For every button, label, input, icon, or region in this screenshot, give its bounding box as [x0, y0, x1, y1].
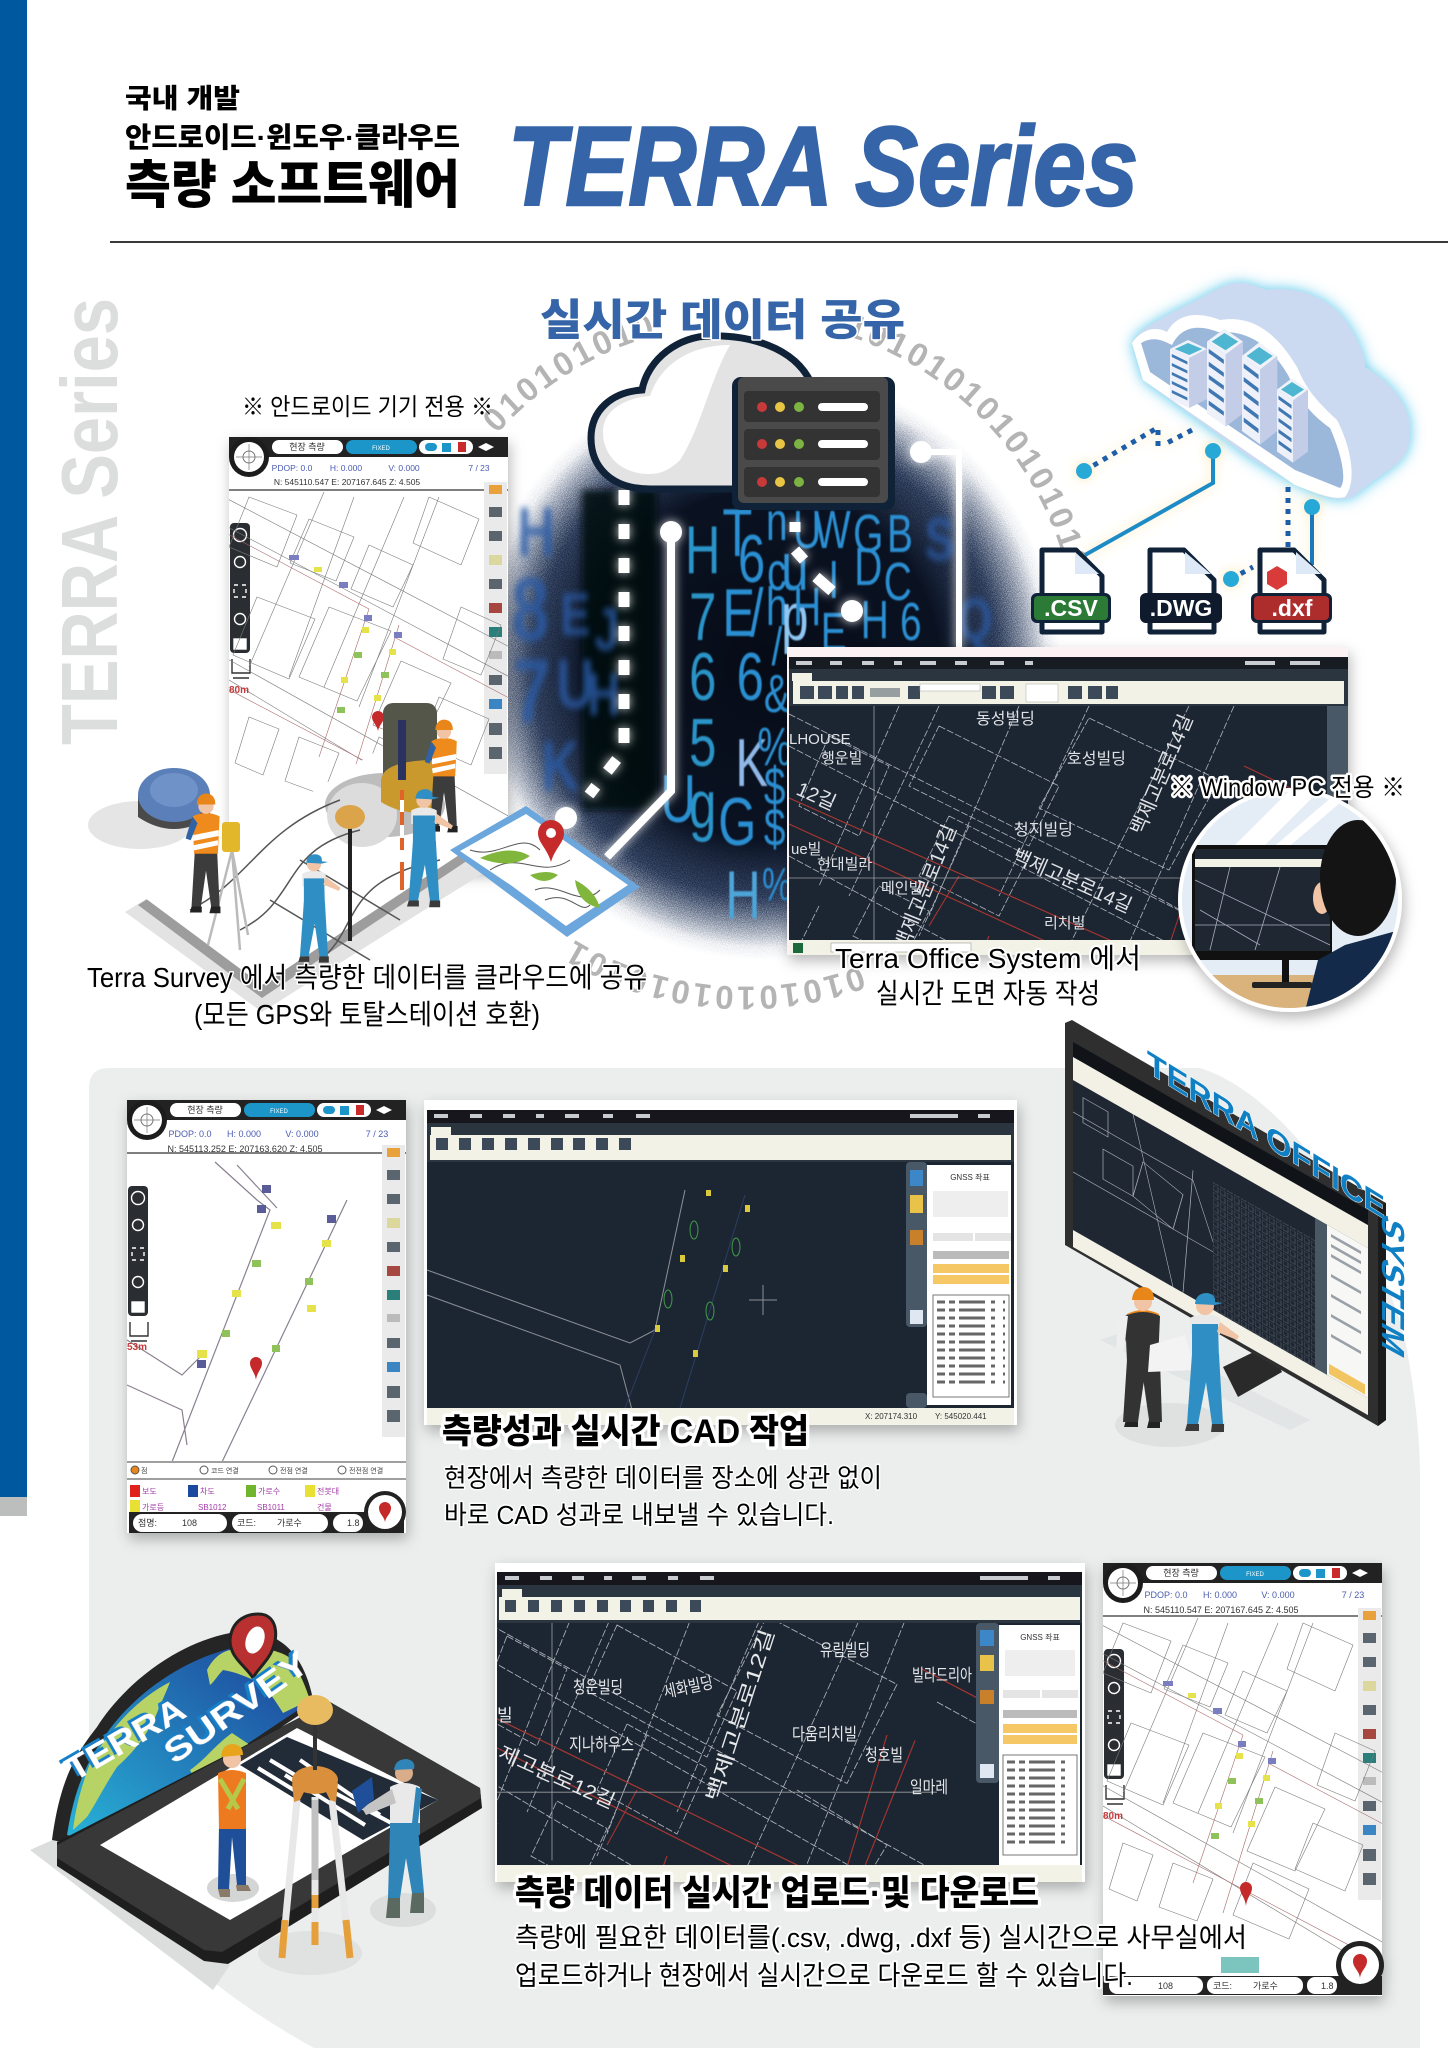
icon: folded map with pin [450, 806, 640, 937]
sharp code glyphs: c [767, 541, 787, 601]
phone status text: V: 0.000 [1261, 1590, 1295, 1600]
bottom survey controls: 건물 [317, 1502, 332, 1512]
bottom survey controls: 점 [141, 1467, 147, 1475]
sharp code glyphs: E [821, 601, 847, 661]
bottom controls: 1.8 [1321, 1981, 1334, 1991]
phone status text: 현장 측량 [187, 1104, 223, 1115]
bottom survey controls: 전점 연결 [280, 1466, 308, 1475]
street map [1098, 1618, 1393, 1963]
phone status text: 80m [1103, 1811, 1123, 1822]
data lines [555, 441, 959, 857]
sharp code glyphs: H [685, 511, 720, 588]
monitor stand [1100, 1330, 1310, 1430]
text: terra office caption [835, 943, 1141, 1009]
phone status text [1103, 1567, 1364, 1822]
CAD canvas [497, 1623, 1082, 1865]
illustration: terra survey tablet [30, 1614, 482, 1990]
ribbon icons [800, 686, 1118, 699]
slab [125, 752, 520, 1012]
header heading [125, 84, 460, 215]
sharp code glyphs: 6 [737, 638, 764, 715]
tablet screen [100, 1728, 438, 1920]
phone status text: 7 / 23 [1342, 1590, 1364, 1600]
GNSS panel [999, 1625, 1080, 1865]
bottom survey controls: 전전점 연결 [349, 1466, 383, 1475]
text: terra survey caption [87, 962, 647, 1030]
CAD labels: 빌 [497, 1706, 513, 1725]
heading: terra: TERRA [59, 1690, 192, 1788]
sharp code glyphs: u [781, 528, 808, 605]
blurred code glyphs: K [541, 728, 579, 806]
sharp code glyphs: I [828, 549, 839, 609]
text: terra office caption: Terra Office System 에서 [835, 943, 1141, 974]
sharp code glyphs: H [861, 589, 889, 649]
bottom survey controls: 점명: [138, 1517, 157, 1528]
bottom survey controls [127, 1461, 406, 1533]
heading: CAD work: 측량성과 실시간 CAD 작업 [442, 1413, 809, 1451]
text: upload description: 측량에 필요한 데이터를(.csv, .dwg, .dxf 등) 실시간으로 사무실에서 [515, 1923, 1247, 1953]
CAD labels [789, 710, 1198, 953]
dome [52, 1632, 314, 1850]
sharp code glyphs: H [793, 576, 821, 636]
sharp code glyphs: 5 [689, 704, 716, 781]
illustration: office monitor [1065, 1020, 1410, 1447]
bottom survey controls: 전봇대 [317, 1486, 339, 1496]
bottom controls: 가로수 [1253, 1981, 1278, 1991]
workers [186, 720, 458, 963]
phone status text: H: 0.000 [330, 463, 362, 473]
icon: total station [381, 703, 437, 890]
icon: locate button [364, 1491, 406, 1533]
CAD labels: 다움리치빌 [792, 1725, 857, 1744]
phone status text: H: 0.000 [227, 1129, 261, 1139]
CAD labels: 12길 [793, 778, 839, 815]
icon: locate button [1336, 1941, 1384, 1989]
sharp code glyphs: % [757, 716, 792, 776]
CAD labels: 청운빌딩 [573, 1678, 623, 1697]
sharp code glyphs: n [766, 491, 788, 551]
CAD labels: 백제고분로14길 [890, 821, 961, 953]
ribbon icons [436, 1138, 631, 1150]
side bar [0, 0, 27, 1516]
text: CAD description: 바로 CAD 성과로 내보낼 수 있습니다. [444, 1500, 834, 1530]
cloud body [1132, 283, 1410, 499]
text: CAD description [444, 1463, 882, 1530]
sharp code glyphs: / [750, 574, 764, 651]
heading: survey: SURVEY [157, 1644, 316, 1771]
panel: CAD screenshot [424, 1100, 1017, 1425]
bottom survey controls: SB1011 [257, 1503, 285, 1512]
panel: gray feature background [89, 1068, 1420, 2048]
header heading: 측량 소프트웨어 [125, 157, 460, 215]
bottom survey controls: 코드 연결 [211, 1466, 239, 1475]
blurred code glyphs: H [517, 494, 555, 572]
text: terra survey caption: Terra Survey 에서 측량한 데이터를 클라우드에 공유 [87, 962, 647, 993]
sharp code glyphs [661, 491, 922, 933]
sharp code glyphs: D [854, 536, 882, 596]
sharp code glyphs: E [722, 574, 755, 651]
header heading: 국내 개발 [125, 84, 240, 114]
bottom survey controls: SB1012 [198, 1503, 227, 1512]
label: android only: ※ 안드로이드 기기 전용 ※ [242, 394, 493, 421]
side tools [906, 1162, 927, 1327]
CAD labels: 청호빌 [865, 1746, 903, 1765]
sharp code glyphs: G [718, 783, 756, 860]
phone status text: H: 0.000 [1203, 1590, 1237, 1600]
panel: CAD screenshot: X: 207174.310 [865, 1412, 918, 1421]
text: upload description [515, 1923, 1247, 1991]
bottom survey controls: 1.8 [347, 1518, 360, 1528]
bottom survey controls: 가로등 [142, 1503, 164, 1512]
server stacks [1170, 329, 1308, 463]
heading: terra office: TERRA OFFICE [1147, 1044, 1385, 1227]
panel: CAD upload screenshot [490, 1562, 1094, 1896]
workers [1115, 1287, 1239, 1447]
CAD labels: 세화빌딩 [662, 1673, 715, 1702]
sharp code glyphs: C [884, 551, 912, 611]
panel: terra office hero screenshot [781, 645, 1358, 969]
sharp code glyphs: G [853, 503, 883, 563]
tripod [258, 1695, 362, 1975]
CAD labels: 메인빌 [881, 880, 922, 897]
workers [207, 1744, 436, 1927]
panel: phone app with route [127, 1100, 406, 1533]
phone status text: N: 545113.252 E: 207163.620 Z: 4.505 [168, 1144, 322, 1154]
blurred code glyphs: Q [957, 587, 993, 654]
title: TERRA Series: TERRA Series [508, 104, 1138, 229]
icon: csv file: .CSV [1044, 595, 1098, 621]
bottom controls: 108 [1158, 1981, 1173, 1991]
connectors to files [1076, 428, 1320, 587]
sharp code glyphs: K [735, 724, 768, 801]
phone status text: FIXED [1246, 1572, 1264, 1578]
phone status text: 7 / 23 [366, 1129, 388, 1139]
CAD labels: 동성빌딩 [976, 710, 1035, 728]
sharp code glyphs: 6 [689, 638, 716, 715]
illustration: cloud with servers [1132, 283, 1410, 499]
icon: dxf file [1251, 550, 1332, 632]
panel: phone app upload [1098, 1563, 1393, 1996]
side tools [976, 1623, 999, 1783]
header rule [110, 241, 1448, 243]
blurred code glyphs [511, 494, 993, 806]
CAD labels: 유림빌딩 [820, 1641, 870, 1660]
sharp code glyphs: W [814, 499, 851, 559]
icon: user at monitor [1170, 788, 1410, 1015]
icon: dwg file [1140, 550, 1222, 632]
icon: map pin [230, 1614, 276, 1678]
bottom survey controls: 코드: [237, 1518, 256, 1528]
CAD labels: 백제고분로12길 [702, 1626, 779, 1805]
blurred code glyphs: 7 [513, 641, 551, 741]
icon: cloud [591, 336, 880, 489]
CAD labels: 일마레 [910, 1778, 948, 1797]
CAD labels: 지나하우스 [569, 1735, 634, 1755]
icon: csv file [1031, 550, 1111, 632]
sharp code glyphs: p [781, 578, 808, 655]
blurred code glyphs: 8 [511, 559, 549, 659]
GNSS panel [927, 1165, 1011, 1405]
bottom survey controls: 가로수 [277, 1518, 302, 1528]
CAD labels: 행운빌 [821, 750, 862, 767]
blurred code glyphs: J [594, 597, 619, 664]
CAD canvas [427, 1162, 1014, 1410]
sharp code glyphs: B [887, 503, 913, 563]
sharp code glyphs: h [766, 576, 788, 636]
phone status text: 53m [127, 1342, 147, 1353]
GNSS panel: GNSS 좌표 [950, 1173, 990, 1182]
status bar [427, 1408, 1014, 1425]
sharp code glyphs: / [771, 616, 783, 676]
illustration: field survey [88, 703, 640, 1012]
phone status text: 80m [229, 685, 249, 696]
bottom survey controls: 보도 [142, 1487, 157, 1496]
panel: CAD screenshot: Y: 545020.441 [935, 1412, 987, 1421]
sharp code glyphs: g [689, 766, 716, 843]
sharp code glyphs: $ [764, 797, 786, 857]
sharp code glyphs: 6 [738, 520, 765, 597]
sharp code glyphs: 6 [900, 591, 922, 651]
monitor screen [1073, 1042, 1368, 1415]
CAD labels: 제고분로12길 [495, 1742, 619, 1813]
monitor body [1065, 1020, 1386, 1426]
bottom survey controls: 108 [182, 1518, 197, 1528]
blurred code glyphs: H [588, 662, 620, 729]
CAD labels: LHOUSE [789, 731, 851, 748]
vertical watermark: TERRA Series [45, 298, 134, 745]
tablet shadow [30, 1838, 230, 1990]
phone status text [127, 1104, 388, 1353]
bottom survey controls: 차도 [200, 1487, 215, 1496]
phone status text: 현장 측량 [289, 441, 325, 452]
CAD labels [495, 1626, 972, 1813]
heading: system: SYSTEM [1375, 1208, 1410, 1363]
phone status text: FIXED [372, 446, 390, 452]
icon: map pin [250, 1357, 262, 1380]
panel: hero phone app [224, 437, 519, 870]
icon: dxf file: .dxf [1272, 595, 1313, 621]
blurred code glyphs: U [556, 646, 594, 724]
GNSS panel: GNSS 좌표 [1020, 1633, 1060, 1642]
text: CAD description: 현장에서 측량한 데이터를 장소에 상관 없이 [444, 1463, 882, 1493]
sharp code glyphs: U [661, 760, 696, 837]
sharp code glyphs: H [725, 856, 761, 933]
sharp code glyphs: $ [764, 756, 786, 816]
phone status text: PDOP: 0.0 [1144, 1590, 1188, 1600]
blurred code glyphs: S [925, 507, 955, 574]
bottom controls [1103, 1941, 1384, 1995]
phone status text: 7 / 23 [468, 463, 490, 473]
sharp code glyphs: & [764, 663, 790, 723]
text: upload description: 업로드하거나 현장에서 실시간으로 다운로드 할 수 있습니다. [515, 1961, 1133, 1991]
phone status text: PDOP: 0.0 [272, 463, 313, 473]
icon: server rack [732, 377, 895, 510]
bottom survey controls: 가로수 [258, 1487, 280, 1496]
survey points [197, 1222, 331, 1358]
icon: map pin [372, 711, 384, 731]
sharp code glyphs: % [762, 860, 792, 910]
phone status text: V: 0.000 [285, 1129, 319, 1139]
phone status text: PDOP: 0.0 [168, 1129, 212, 1139]
phone status text: N: 545110.547 E: 207167.645 Z: 4.505 [274, 477, 420, 487]
heading: data upload and download: 측량 데이터 실시간 업로드·및 다운로드 [515, 1874, 1039, 1913]
binary ring: 01010101010101 [568, 940, 864, 1010]
blurred code glyphs: E [560, 582, 590, 649]
sphere background [470, 370, 1060, 960]
cloud opening [1132, 315, 1352, 498]
street map [229, 492, 508, 816]
sharp code glyphs: T [722, 494, 752, 571]
CAD labels: 리치빌 [1044, 915, 1085, 932]
heading: real-time data sharing: 실시간 데이터 공유 [540, 297, 905, 345]
icon: map pin [1240, 1882, 1252, 1906]
CAD labels: 백제고분로14길 [1009, 845, 1135, 918]
route lines [127, 1162, 347, 1462]
text: terra survey caption: (모든 GPS와 토탈스테이션 호환) [194, 999, 540, 1030]
CAD labels: 호성빌딩 [1067, 750, 1126, 768]
tablet body [57, 1702, 482, 1964]
sharp code glyphs: 7 [689, 578, 716, 655]
CAD labels: ue빌 [791, 841, 822, 858]
phone status text: N: 545110.547 E: 207167.645 Z: 4.505 [1144, 1605, 1298, 1615]
phone status text: V: 0.000 [388, 463, 420, 473]
CAD labels: 빌라드리아 [912, 1666, 972, 1685]
CAD labels: 청지빌딩 [1014, 821, 1073, 839]
icon: GNSS receiver [88, 768, 210, 849]
panel: hero data sphere [484, 316, 1088, 1010]
header heading: 안드로이드·윈도우·클라우드 [125, 122, 460, 153]
icon: dwg file: .DWG [1150, 595, 1212, 621]
CAD canvas [789, 706, 1348, 940]
phone status text: 현장 측량 [1163, 1567, 1199, 1578]
sharp code glyphs: U [793, 499, 821, 559]
label: window pc only: ※ Window PC 전용 ※ [1170, 774, 1405, 802]
phone status text: FIXED [270, 1109, 288, 1115]
CAD labels: 현대빌라 [817, 856, 872, 873]
icon: tripod with GNSS [208, 805, 365, 950]
phone status text [229, 441, 490, 696]
text: terra office caption: 실시간 도면 자동 작성 [876, 978, 1100, 1009]
CAD labels: 백제고분로14길 [1126, 711, 1198, 838]
binary ring [484, 316, 1088, 1010]
bottom controls: 코드: [1213, 1981, 1232, 1991]
ribbon icons [505, 1600, 701, 1612]
